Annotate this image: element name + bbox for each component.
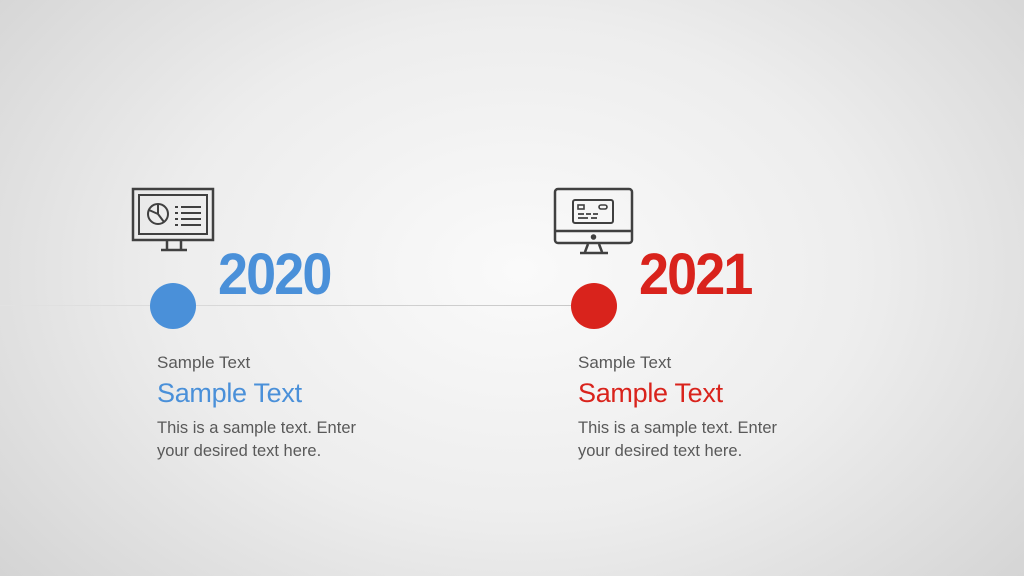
text block 2021: [578, 353, 777, 460]
text block 2021: Sample Text: [578, 353, 671, 372]
text block 2020: This is a sample text. Enter: [157, 419, 356, 437]
text block 2020: [157, 353, 356, 460]
year 2020: 2020: [218, 242, 331, 307]
text block 2021: This is a sample text. Enter: [578, 419, 777, 437]
text block 2020: your desired text here.: [157, 442, 321, 460]
icon: monitor with chart: [132, 188, 214, 252]
timeline line: [0, 305, 580, 306]
text block 2021: your desired text here.: [578, 442, 742, 460]
text block 2020: Sample Text: [157, 378, 302, 408]
marker: blue circle: [150, 283, 196, 329]
icon: monitor with card: [554, 188, 634, 254]
year 2021: 2021: [639, 242, 752, 307]
marker: red circle: [571, 283, 617, 329]
text block 2021: Sample Text: [578, 378, 723, 408]
text block 2020: Sample Text: [157, 353, 250, 372]
